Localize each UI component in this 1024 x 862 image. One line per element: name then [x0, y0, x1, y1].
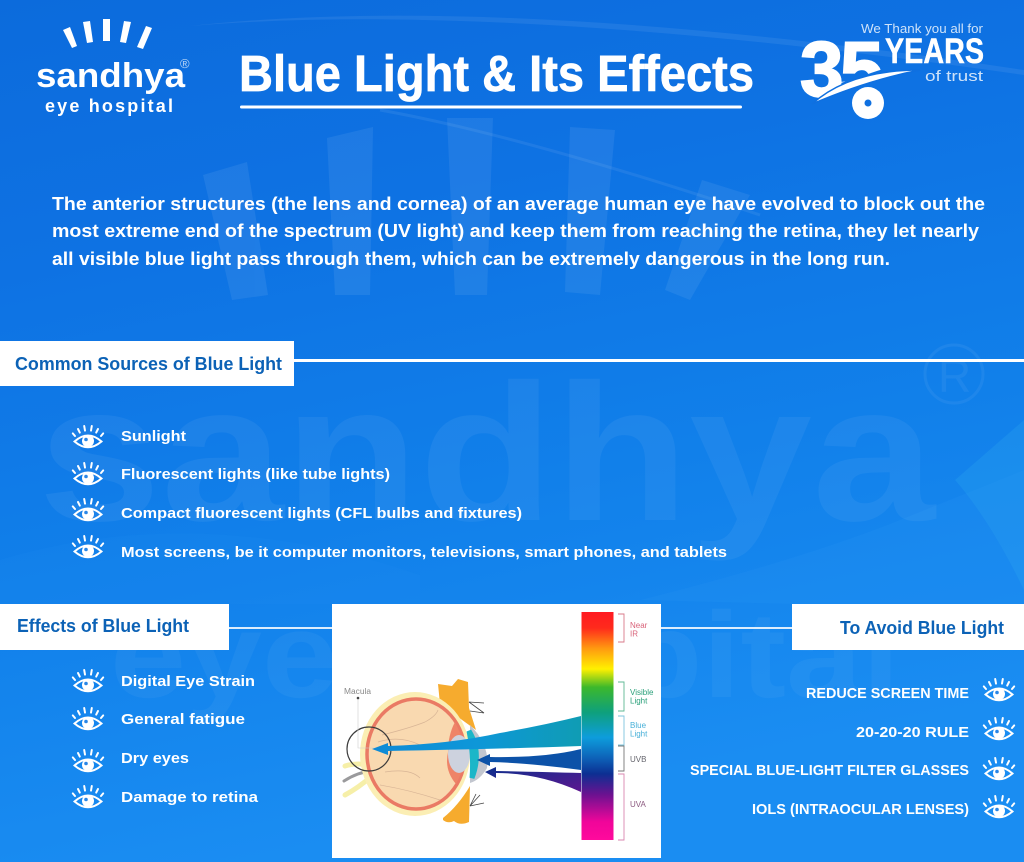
eyeball [360, 692, 470, 816]
heading: to avoid [792, 604, 1024, 650]
list item: compact fluorescent lights [73, 499, 522, 522]
label: blue light: Blue [630, 721, 646, 730]
intro paragraph: The anterior structures (the lens and cornea) of an average human eye have evolved to block out the [52, 194, 985, 214]
tip: 20-20-20 rule: 20-20-20 RULE [856, 724, 969, 741]
tip: 20-20-20 rule [856, 718, 1014, 741]
lens and cornea [448, 725, 487, 783]
tip: IOLs [752, 796, 1014, 818]
intro paragraph: most extreme end of the spectrum (UV light) and keep them from reaching the retina, they let nearly [52, 221, 979, 241]
blue light beam [372, 716, 581, 755]
label: visible light: Visible [630, 688, 653, 697]
effect: damage to retina [73, 786, 259, 807]
effect: digital eye strain [73, 670, 255, 691]
spectrum brackets [618, 614, 624, 840]
logo: Sandhya Eye Hospital [36, 19, 190, 116]
list item: compact fluorescent lights: Compact fluorescent lights (CFL bulbs and fixtures) [121, 505, 522, 522]
label: near IR: IR [630, 630, 638, 638]
UVB beam [477, 749, 581, 770]
title underline [240, 106, 742, 108]
label: near IR: Near [630, 621, 647, 630]
list item: fluorescent lights [73, 463, 390, 484]
badge eye [852, 87, 884, 119]
macula callout: Macula [344, 687, 372, 696]
badge YEARS: YEARS [885, 32, 984, 71]
watermark: sandhya: R [938, 350, 971, 402]
effect: damage to retina: Damage to retina [121, 789, 259, 806]
label: UVA: UVA [630, 800, 647, 809]
title: Blue Light & Its Effects [239, 45, 754, 102]
label: visible light: Light [630, 696, 648, 706]
badge swoosh [812, 70, 920, 104]
tip: reduce screen time [806, 679, 1014, 702]
logo tagline: eye hospital [45, 96, 173, 116]
effect: dry eyes [73, 750, 189, 771]
spectrum labels [630, 621, 654, 809]
watermark: sandhya: sandhya [38, 344, 937, 562]
badge number 5: 5 [840, 25, 883, 113]
UVA beam [485, 767, 581, 792]
effect: general fatigue [73, 708, 245, 729]
badge thank-you line: We Thank you all for [861, 21, 984, 36]
optic nerve [344, 750, 450, 795]
spectrum bar [582, 612, 614, 840]
heading: common sources [0, 341, 294, 386]
panel: common sources of blue light [0, 341, 1024, 561]
icon: logo rays [63, 19, 152, 49]
heading: common sources: Common Sources of Blue Light [15, 354, 282, 374]
panel: to avoid blue light [661, 604, 1024, 818]
eye socket bone [438, 679, 476, 824]
list item: screens [73, 536, 727, 561]
list item: sunlight [73, 426, 186, 447]
logo wordmark: sandhya [36, 57, 186, 95]
eyelashes [469, 702, 484, 806]
panel: eye diagram [332, 604, 661, 858]
heading: effects [0, 604, 229, 650]
tip: IOLs: IOLS (INTRAOCULAR LENSES) [752, 801, 969, 818]
list item: fluorescent lights: Fluorescent lights (like tube lights) [121, 466, 390, 483]
effect: digital eye strain: Digital Eye Strain [121, 673, 255, 690]
badge of trust: of trust [925, 68, 984, 85]
intro paragraph: all visible blue light pass through them, which can be extremely dangerous in the long run. [52, 249, 890, 269]
label: blue light: Light [630, 730, 648, 738]
badge number 3: 3 [800, 25, 843, 113]
badge: 35 years of trust [800, 21, 984, 119]
tip: reduce screen time: REDUCE SCREEN TIME [806, 685, 969, 702]
registered mark: ® [180, 56, 190, 71]
heading: effects: Effects of Blue Light [17, 616, 189, 636]
intro paragraph [52, 194, 985, 269]
list item: screens: Most screens, be it computer monitors, televisions, smart phones, and tablets [121, 544, 727, 561]
watermark: eye hospital: eye hospital [110, 587, 900, 723]
retinal veins [378, 710, 440, 800]
tip: filter glasses: SPECIAL BLUE-LIGHT FILTER GLASSES [690, 762, 969, 779]
label: UVB: UVB [630, 755, 646, 764]
watermark: logo rays [203, 118, 750, 300]
macula callout [344, 687, 391, 771]
effect: general fatigue: General fatigue [121, 711, 245, 728]
panel: effects of blue light [0, 604, 332, 807]
heading: to avoid: To Avoid Blue Light [840, 618, 1004, 638]
effect: dry eyes: Dry eyes [121, 750, 189, 767]
list item: sunlight: Sunlight [121, 428, 186, 445]
